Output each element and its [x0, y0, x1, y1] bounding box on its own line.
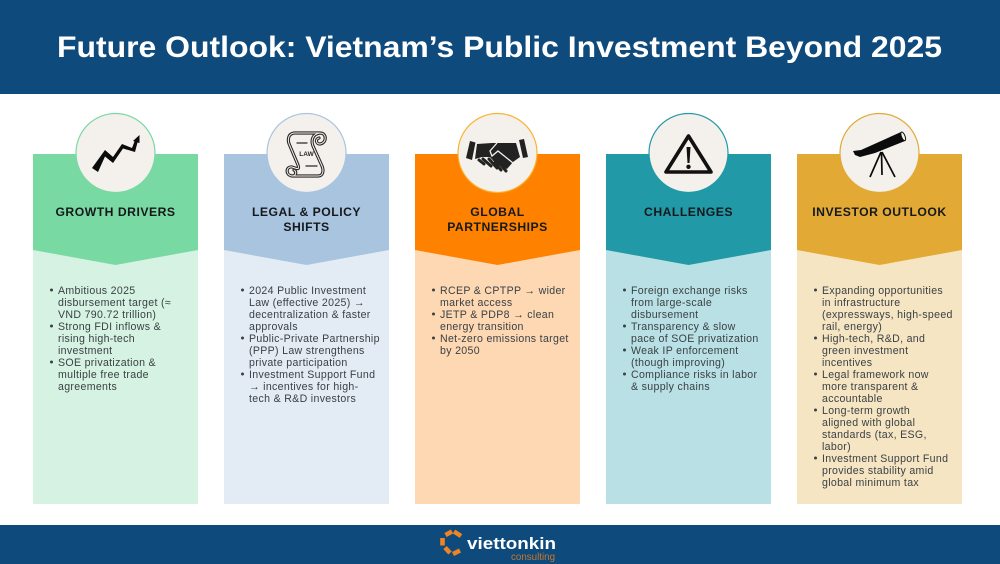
text block: investor outlook: Expanding opportunities	[822, 285, 943, 297]
icon: law scroll	[287, 133, 325, 176]
text block: challenges	[623, 285, 759, 393]
text block: global partnerships: energy transition	[440, 321, 524, 333]
icon: warning triangle	[666, 136, 711, 172]
heading: challenges: CHALLENGES	[644, 205, 733, 219]
text block: legal and policy: 2024 Public Investment	[249, 285, 366, 297]
title: Future Outlook: Vietnam’s Public Investment Beyond 2025	[57, 31, 942, 64]
icon: rising arrow	[92, 135, 140, 172]
text block: investor outlook: in infrastructure	[822, 297, 900, 309]
text block: growth drivers: Ambitious 2025	[58, 285, 136, 297]
text block: challenges: pace of SOE privatization	[631, 333, 759, 345]
heading line two: SHIFTS	[283, 220, 330, 234]
text block: challenges: Compliance risks in labor	[631, 369, 757, 381]
text block: investor outlook: accountable	[822, 393, 883, 405]
icon: law scroll: LAW	[299, 151, 315, 158]
text block: legal and policy: Investment Support Fund	[249, 369, 375, 381]
text block: challenges: Transparency & slow	[631, 321, 736, 333]
panel: challenges	[606, 114, 771, 504]
text block: challenges: from large-scale	[631, 297, 712, 309]
panel: legal and policy shifts	[224, 114, 389, 504]
text block: growth drivers: VND 790.72 trillion)	[58, 309, 156, 321]
text block: growth drivers: disbursement target (≈	[58, 297, 171, 309]
text block: legal and policy: private participation	[249, 357, 348, 369]
text block: growth drivers: rising high-tech	[58, 333, 135, 345]
text block: legal and policy: (PPP) Law strengthens	[249, 345, 365, 357]
heading: growth drivers: GROWTH DRIVERS	[55, 205, 176, 219]
header band	[0, 0, 1000, 94]
text block: global partnerships: market access	[440, 297, 512, 309]
text block: global partnerships: JETP & PDP8 → clean	[440, 309, 554, 321]
text block: challenges: Foreign exchange risks	[631, 285, 748, 297]
text block: growth drivers: investment	[58, 345, 112, 357]
text block: legal and policy	[241, 285, 380, 405]
text block: legal and policy: decentralization & faster	[249, 309, 371, 321]
heading line two: PARTNERSHIPS	[447, 220, 548, 234]
text block: global partnerships: Net-zero emissions target	[440, 333, 569, 345]
logo mark	[442, 532, 461, 554]
heading: investor outlook: INVESTOR OUTLOOK	[812, 205, 947, 219]
text block: challenges: & supply chains	[631, 381, 710, 393]
text block: investor outlook: standards (tax, ESG,	[822, 429, 927, 441]
text block: legal and policy: Public-Private Partnership	[249, 333, 380, 345]
text block: legal and policy: approvals	[249, 321, 298, 333]
text block: global partnerships: by 2050	[440, 345, 480, 357]
text block: growth drivers: agreements	[58, 381, 117, 393]
text block: global partnerships: RCEP & CPTPP → wider	[440, 285, 566, 297]
text block: growth drivers: Strong FDI inflows &	[58, 321, 161, 333]
text block: investor outlook: rail, energy)	[822, 321, 882, 333]
text block: investor outlook: Investment Support Fund	[822, 453, 948, 465]
heading: global partnerships: GLOBAL	[470, 205, 525, 219]
text block: growth drivers: multiple free trade	[58, 369, 149, 381]
text block: growth drivers	[50, 285, 171, 393]
text block: investor outlook: labor)	[822, 441, 851, 453]
heading: legal and policy shifts: LEGAL & POLICY	[252, 205, 361, 219]
panel: global partnerships	[415, 114, 580, 504]
text block: investor outlook: global minimum tax	[822, 477, 919, 489]
text block: investor outlook: Legal framework now	[822, 369, 929, 381]
text block: investor outlook: aligned with global	[822, 417, 915, 429]
text block: investor outlook: more transparent &	[822, 381, 918, 393]
text block: legal and policy: Law (effective 2025) →	[249, 297, 365, 309]
text block: investor outlook: (expressways, high-speed	[822, 309, 953, 321]
footer band	[0, 525, 1000, 564]
logo tagline: consulting	[511, 551, 555, 563]
text block: legal and policy: tech & R&D investors	[249, 393, 356, 405]
text block: growth drivers: SOE privatization &	[58, 357, 156, 369]
text block: legal and policy: → incentives for high-	[249, 381, 359, 393]
text block: challenges: disbursement	[631, 309, 698, 321]
text block: investor outlook: High-tech, R&D, and	[822, 333, 925, 345]
icon: handshake	[466, 139, 528, 171]
text block: investor outlook	[814, 285, 953, 489]
panel: investor outlook	[797, 114, 962, 504]
text block: challenges: (though improving)	[631, 357, 725, 369]
text block: global partnerships	[432, 285, 569, 357]
text block: investor outlook: green investment	[822, 345, 908, 357]
text block: investor outlook: Long-term growth	[822, 405, 910, 417]
icon: telescope	[853, 131, 907, 177]
logo wordmark: viettonkin	[467, 535, 556, 553]
text block: investor outlook: provides stability amid	[822, 465, 934, 477]
text block: challenges: Weak IP enforcement	[631, 345, 739, 357]
text block: investor outlook: incentives	[822, 357, 872, 369]
panel: growth drivers	[33, 114, 198, 504]
